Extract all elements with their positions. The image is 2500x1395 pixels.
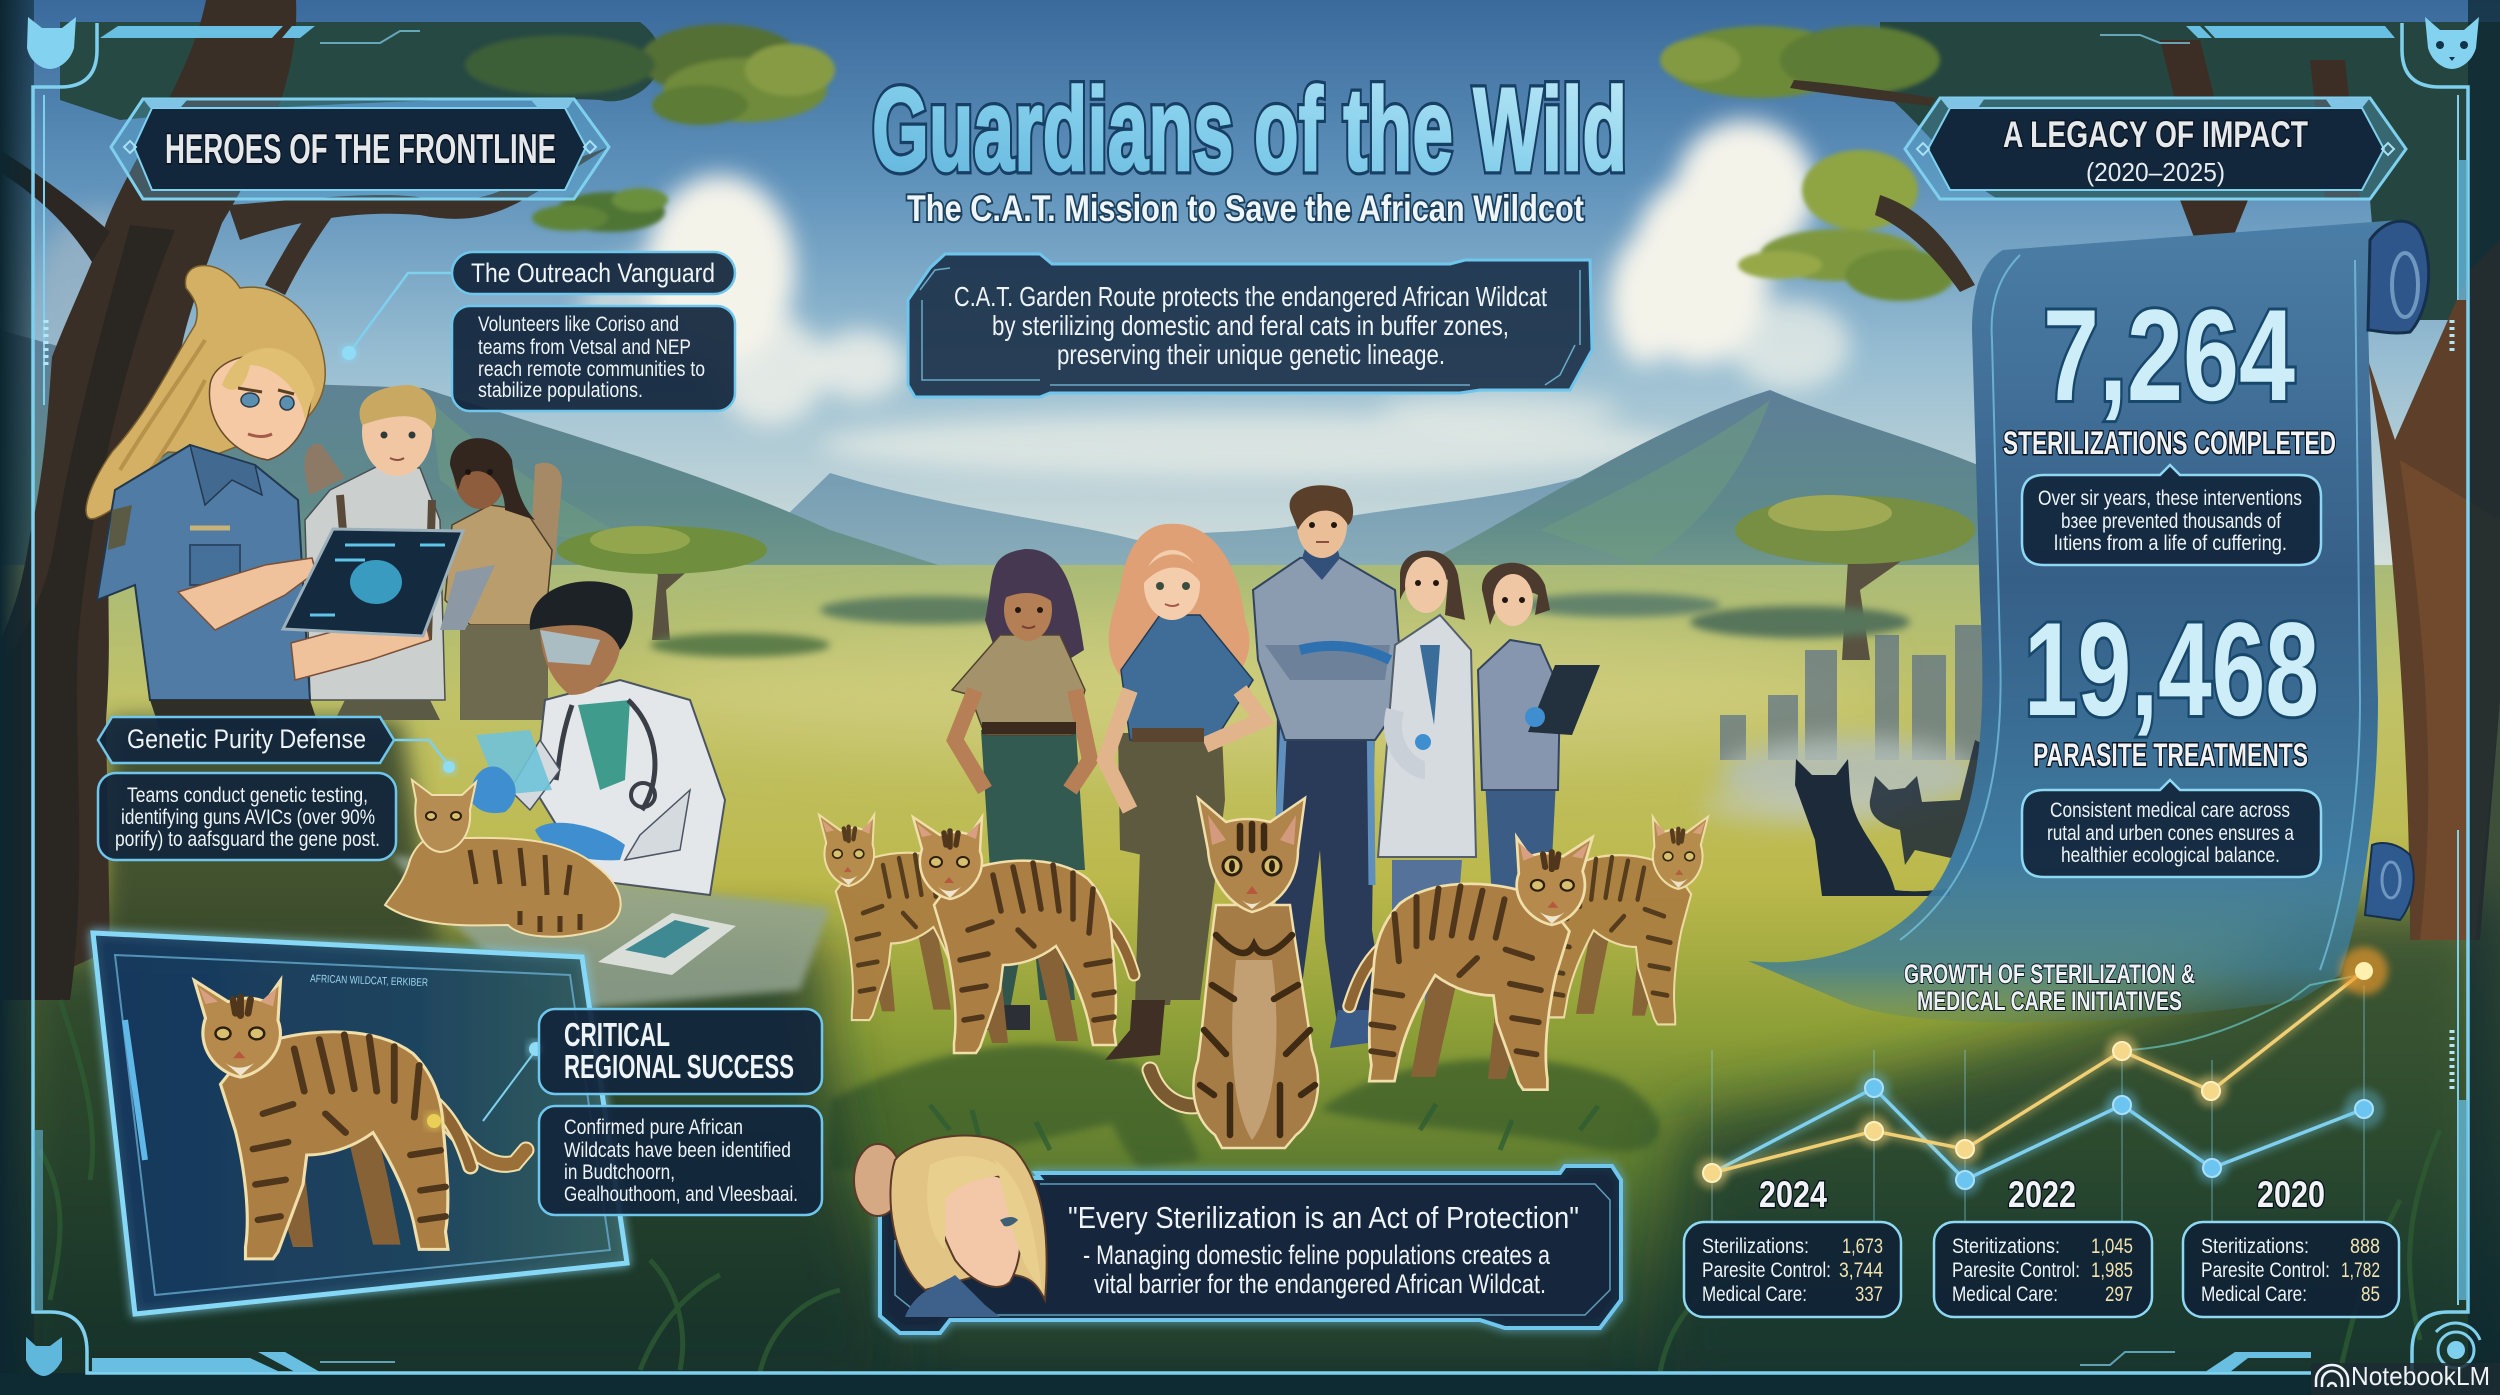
stat: sterilizations [2003,282,2336,565]
cat: central sitting [1150,798,1318,1148]
figures: 1,673 [1842,1235,1883,1258]
tablet [283,529,495,636]
background: mountains [0,330,2400,620]
background: lighting and grass shadows [0,593,2500,1395]
figures: Medical Care: [1702,1283,1807,1306]
right tree [1660,22,2500,940]
person: ranger with copper hair [1105,524,1262,1060]
figures: Paresite Control: [2201,1259,2330,1282]
person: doctor in lab coat [1378,551,1476,1010]
body text: stabilize populations. [478,379,643,402]
quote body [1083,1240,1551,1299]
stat: sterilizations: 7,264 [2043,282,2295,428]
faint trend trace [2130,975,2360,1050]
figures [1934,1222,2152,1317]
foreground grass blades [40,1000,2440,1372]
year label: 2020 [2257,1174,2325,1215]
figures: 1,045 [2091,1235,2133,1258]
panel: quote [854,1136,1621,1333]
body text: Gealhouthoom, and Vleesbaai. [564,1183,798,1206]
cat: scanned specimen [194,980,526,1259]
body text: porify) to aafsguard the gene post. [115,828,380,851]
chart title [1904,959,2195,1016]
title: Guardians of the Wild [872,64,1627,196]
heading plate: A Legacy of Impact [1905,98,2406,199]
stat: parasite treatments [2022,596,2321,877]
body text: teams from Vetsal and NEP [478,336,691,359]
exam table [390,855,830,1010]
background: clouds [40,120,1850,477]
wildcats pride [819,798,1708,1148]
left branch [0,150,110,262]
body text [98,773,396,860]
person: medic in grey suit [1253,485,1403,1048]
figures: Paresite Control: [1702,1259,1831,1282]
pill heading: Genetic Purity Defense [127,724,366,754]
figures: Sterilizations: [1702,1235,1809,1258]
background: sky [0,0,2500,600]
stat note: Over sir years, these interventions [2038,487,2302,510]
body text: in Budtchoorn, [564,1161,675,1184]
body text: reach remote communities to [478,358,705,381]
person: vet coat [535,680,725,895]
figures: Medical Care: [2201,1283,2307,1306]
cat: right outer [1531,817,1708,1024]
body text: Wildcats have been identified [564,1139,791,1162]
stat: sterilizations: STERILIZATIONS COMPLETED [2003,425,2336,461]
person: colleague in khaki [445,438,562,720]
connector with dot [394,740,455,773]
background: savanna grass [0,565,2500,1395]
person: ranger face [209,355,311,460]
data card: 2024 [1684,1174,1901,1317]
icon: cat corner top left [27,17,76,69]
panel: mission statement [908,254,1592,397]
person: ranger in khaki [952,549,1090,1030]
icon: notebook arcs [2316,1365,2348,1387]
panel: mission statement: by sterilizing domestic and feral cats in buffer zones, [992,310,1509,341]
central team of five guardians [952,485,1600,1060]
quote body: - Managing domestic feline populations creates a [1083,1240,1551,1270]
background: acacia trees [557,495,1975,660]
callout: Genetic Purity Defense [98,717,455,860]
trunk [0,0,296,1000]
stat note [2022,465,2321,565]
papers on table [598,913,736,975]
figures: Medical Care: [1952,1283,2058,1306]
person: ranger arms [178,558,430,680]
chart title: GROWTH OF STERILIZATION & [1904,959,2195,989]
veterinarian with wildcat on table [385,581,830,1010]
figures: 1,782 [2341,1259,2380,1282]
holographic wildcat scan panel [93,933,627,1314]
scroll bottom roll [2365,843,2414,920]
figures [1684,1222,1901,1317]
scroll sheet [1748,220,2399,1022]
figures: Steritizations: [1952,1235,2060,1258]
figures [2183,1222,2399,1317]
figures: 297 [2105,1283,2133,1306]
stat: parasite treatments: 19,468 [2024,596,2319,744]
connector with dot [342,273,452,360]
person: vet head [540,596,622,695]
heading box: CRITICAL [564,1016,670,1053]
body text: Teams conduct genetic testing, [127,784,368,807]
portrait: blonde guardian [854,1136,1047,1317]
cat: right inner [1349,837,1592,1090]
figures: Steritizations: [2201,1235,2309,1258]
data card: 2020 [2183,1174,2399,1317]
subtitle: The C.A.T. Mission to Save the African Wildcot [907,188,1584,229]
foliage clumps [465,24,835,232]
series: blue [1712,1072,2384,1196]
pill heading [452,252,735,294]
data card: 2022 [1934,1174,2152,1317]
trunks behind plate [2160,40,2360,240]
foliage clumps [1660,26,1955,301]
figures: Paresite Control: [1952,1259,2080,1282]
background: dark cat silhouettes [1795,740,1985,896]
body text: Volunteers like Coriso and [478,313,679,336]
stat note [2022,780,2321,877]
body text: identifying guns AVICs (over 90% [121,806,375,829]
icon: target corner bottom right [2436,1323,2480,1368]
stat note: Consistent medical care across [2050,799,2290,822]
pill heading [98,717,394,763]
chart title: MEDICAL CARE INITIATIVES [1917,986,2182,1016]
year label: 2024 [1759,1174,1827,1215]
background: distant city and mist [1700,625,1985,825]
wildcat lying on table [385,834,621,937]
heading box: REGIONAL SUCCESS [564,1048,794,1085]
stat note: healthier ecological balance. [2061,844,2280,867]
year label: 2022 [2008,1174,2076,1215]
branches [1790,80,1975,292]
stat note: bзee prevented thousands of [2061,510,2281,533]
title [872,64,1627,196]
marker dot [427,1114,441,1128]
series: gold [1696,947,2388,1189]
callout: The Outreach Vanguard [342,252,735,411]
right branches [228,147,609,295]
title: Guardians of the Wild [872,64,1627,196]
figures: 1,985 [2091,1259,2133,1282]
quote heading: "Every Sterilization is an Act of Protection" [1068,1200,1579,1235]
person: ranger hair [86,266,325,519]
heading text: HEROES OF THE FRONTLINE [165,125,556,172]
callout: Critical Regional Success [529,1009,822,1215]
figures: 3,744 [1839,1259,1883,1282]
heading text: A LEGACY OF IMPACT [2003,114,2308,155]
figures: 888 [2350,1235,2380,1258]
quote body: vital barrier for the endangered African Wildcat. [1094,1269,1546,1299]
body text [539,1106,822,1215]
canopy shadow [1880,22,2500,320]
left tree [0,0,835,1000]
figures: 337 [1855,1283,1883,1306]
connector line [483,1050,536,1121]
watermark text: NotebookLM [2351,1361,2490,1391]
cat: left outer [819,815,996,1020]
watermark: NotebookLM [2311,1361,2500,1395]
cat: left inner [913,817,1134,1053]
scroll with statistics [1748,220,2429,1022]
icon: cat corner top right [2425,17,2479,69]
heading box [539,1009,822,1094]
line chart [1696,947,2388,1222]
person: technician with clipboard [1478,563,1600,900]
scroll top roll [2368,221,2429,333]
person: ranger shirt [97,445,310,700]
scroll edge highlights [1900,255,2360,970]
date range: (2020–2025) [2086,157,2225,187]
canopy shadow [60,22,661,120]
sample card and gloves [476,730,552,795]
panel: mission statement: C.A.T. Garden Route protects the endangered African Wildcat [954,281,1547,312]
figures: 85 [2361,1283,2380,1306]
heading plate: Heroes of the Frontline [111,99,609,199]
stat note: lıtiens from a life of cuffering. [2054,532,2287,555]
left team: ranger, volunteer, colleague [86,266,562,730]
main trunk [2367,240,2500,940]
panel label: AFRICAN WILDCAT, ERKIBER [310,973,428,989]
body text: Confirmed pure African [564,1116,743,1139]
icon: cat corner bottom left [26,1337,62,1376]
stat note: rutal and urben cones ensures a [2047,822,2294,845]
body text [452,306,735,411]
stat: parasite treatments: PARASITE TREATMENTS [2033,737,2308,773]
panel: mission statement: preserving their unique genetic lineage. [1057,339,1445,370]
pill heading: The Outreach Vanguard [471,258,715,288]
person: male volunteer [304,385,445,720]
